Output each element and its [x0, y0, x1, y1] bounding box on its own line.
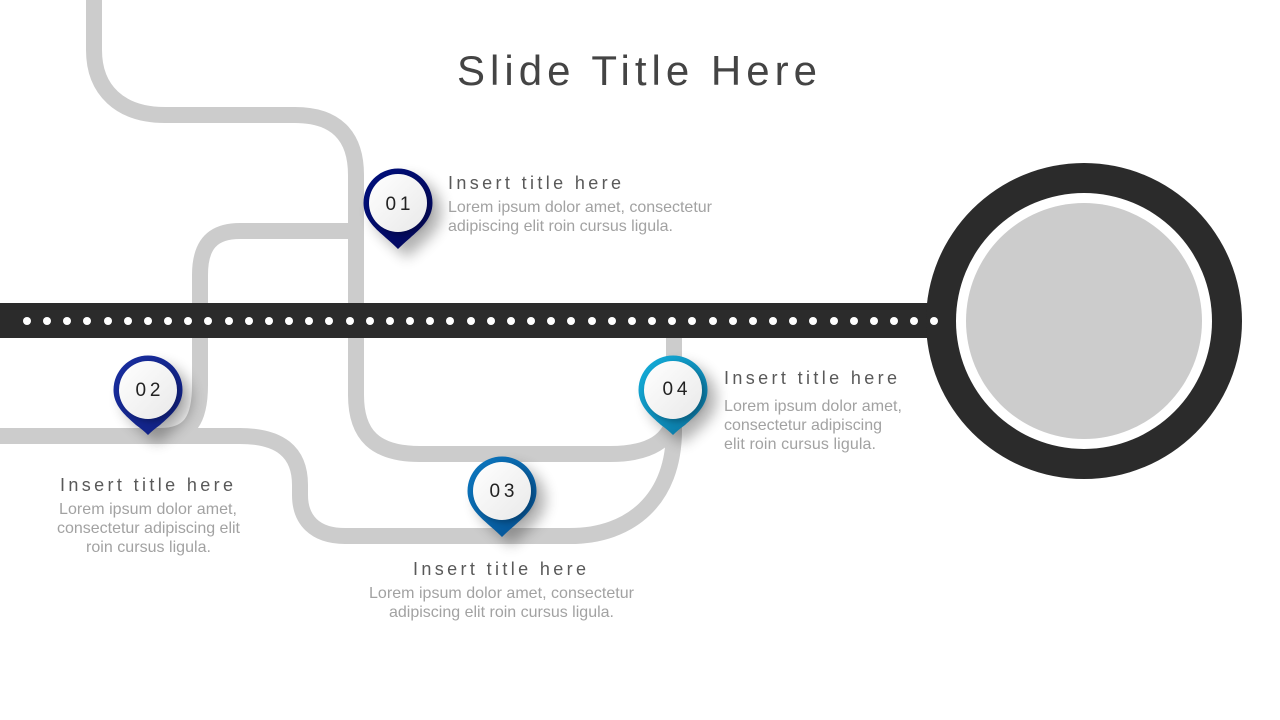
text block 04: consectetur adipiscing — [724, 417, 882, 434]
text block 01: adipiscing elit roin cursus ligula. — [448, 218, 673, 235]
pin 01 — [364, 168, 442, 258]
pin 02: 02 — [136, 380, 160, 401]
pin 03: 03 — [490, 481, 514, 502]
text block 04: Insert title here — [724, 368, 897, 388]
text block 03 — [369, 559, 635, 621]
text block 04: Lorem ipsum dolor amet, — [724, 398, 902, 415]
title: Slide Title Here — [457, 47, 817, 94]
text block 03: Insert title here — [413, 559, 586, 579]
road network — [0, 0, 674, 536]
text block 02: Lorem ipsum dolor amet, — [59, 501, 237, 518]
pin 03 — [468, 456, 546, 546]
target circle — [926, 163, 1242, 479]
pin 04: 04 — [662, 379, 688, 400]
text block 04: elit roin cursus ligula. — [724, 436, 876, 453]
road dots — [23, 317, 938, 325]
text block 01: Lorem ipsum dolor amet, consectetur — [448, 199, 713, 216]
text block 01 — [448, 173, 713, 235]
text block 03: Lorem ipsum dolor amet, consectetur — [369, 585, 635, 602]
text block 03: adipiscing elit roin cursus ligula. — [389, 604, 614, 621]
text block 02: Insert title here — [60, 475, 233, 495]
text block 01: Insert title here — [448, 173, 621, 193]
text block 04 — [724, 368, 902, 453]
main road bar — [0, 303, 935, 338]
pin 04 — [638, 356, 716, 444]
pin 02 — [114, 356, 192, 444]
text block 02: roin cursus ligula. — [86, 539, 211, 556]
text block 02: consectetur adipiscing elit — [57, 520, 241, 537]
pin 01: 01 — [386, 194, 410, 215]
text block 02 — [57, 475, 241, 556]
